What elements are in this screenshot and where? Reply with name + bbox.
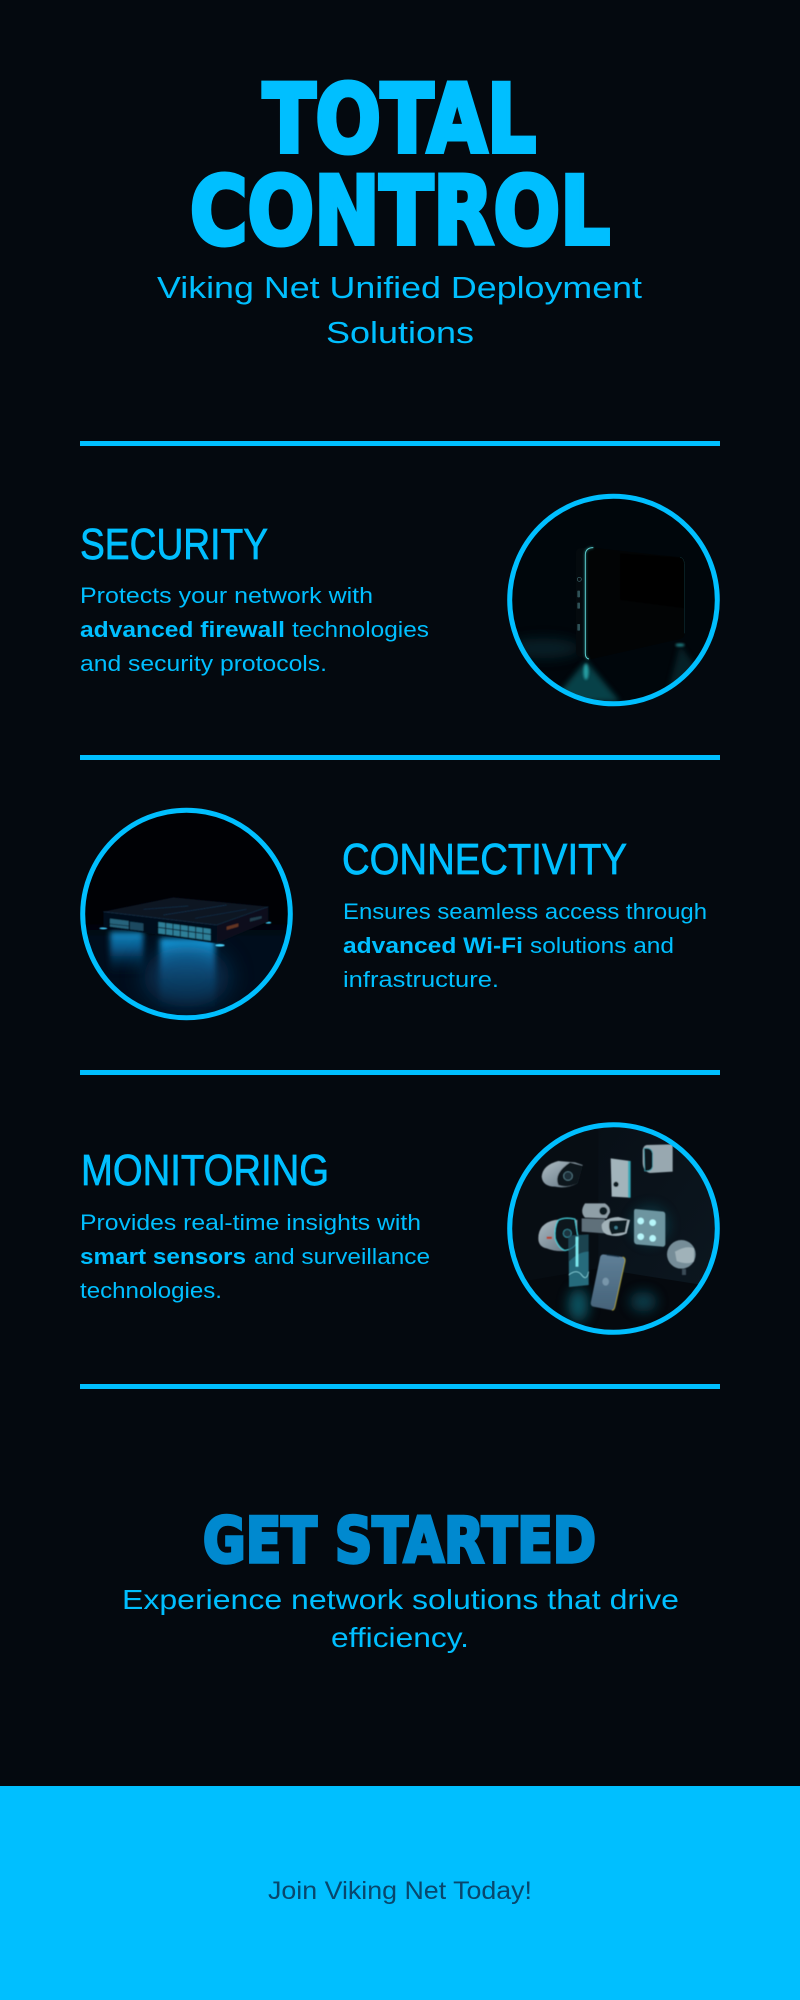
glass xyxy=(568,1234,589,1287)
footer call to action: Join Viking Net Today! xyxy=(268,1877,532,1905)
heading: monitoring: MONITORING xyxy=(81,1146,329,1195)
text: connectivity description: infrastructure. xyxy=(343,967,499,992)
panel: connectivity xyxy=(78,805,707,1025)
switch top xyxy=(103,897,268,925)
subtitle: Solutions xyxy=(326,315,474,350)
title: CONTROL xyxy=(190,158,610,266)
image: network switch in circle xyxy=(78,805,298,1025)
device body xyxy=(576,646,577,651)
subtitle xyxy=(157,270,642,350)
doorbell xyxy=(611,1158,630,1198)
switch right side xyxy=(217,907,268,943)
edge glow xyxy=(585,548,593,659)
ports xyxy=(110,919,129,929)
text: get started tagline: Experience network solutions that drive xyxy=(122,1584,679,1615)
heading: connectivity: CONNECTIVITY xyxy=(342,835,627,884)
camera top left xyxy=(542,1161,583,1187)
text: get started tagline: efficiency. xyxy=(331,1622,469,1653)
text: connectivity description xyxy=(343,899,707,992)
text: connectivity description: solutions and xyxy=(530,933,674,958)
title xyxy=(190,66,610,266)
subtitle: Viking Net Unified Deployment xyxy=(157,270,642,305)
text: security description: Protects your network with xyxy=(80,583,373,608)
text: monitoring description: and surveillance xyxy=(254,1244,430,1269)
panel: security xyxy=(80,490,725,710)
text: security description xyxy=(80,583,429,676)
text: monitoring description: technologies. xyxy=(80,1278,222,1303)
text: connectivity description: advanced Wi-Fi xyxy=(343,933,523,958)
big cam left xyxy=(538,1218,577,1251)
image: smart sensors and cameras in circle xyxy=(503,1118,725,1340)
text: monitoring description xyxy=(80,1210,430,1303)
title: TOTAL xyxy=(263,66,536,174)
pair cam xyxy=(582,1203,610,1218)
camera top right xyxy=(643,1144,673,1173)
four dot panel xyxy=(634,1209,665,1247)
phone xyxy=(591,1254,625,1310)
heading: get started: GET STARTED xyxy=(203,1504,596,1577)
image: firewall device in circle xyxy=(505,490,725,710)
dome sensor xyxy=(667,1240,696,1269)
floor xyxy=(86,930,286,1016)
switch front xyxy=(103,912,217,943)
light reflections xyxy=(110,932,143,975)
text: security description: and security protocols. xyxy=(80,651,327,676)
floor glow xyxy=(507,638,580,658)
text: security description: technologies xyxy=(292,617,429,642)
heading: security: SECURITY xyxy=(80,520,268,569)
text: monitoring description: Provides real-time insights with xyxy=(80,1210,421,1235)
side buttons xyxy=(577,577,581,581)
switch xyxy=(103,897,268,943)
footer band xyxy=(0,1786,800,2000)
panel: monitoring xyxy=(80,1118,725,1340)
walls and floor xyxy=(503,1118,598,1285)
text: get started tagline xyxy=(122,1584,679,1653)
text: connectivity description: Ensures seamless access through xyxy=(343,899,707,924)
text: security description: advanced firewall xyxy=(80,617,285,642)
text: monitoring description: smart sensors xyxy=(80,1244,246,1269)
